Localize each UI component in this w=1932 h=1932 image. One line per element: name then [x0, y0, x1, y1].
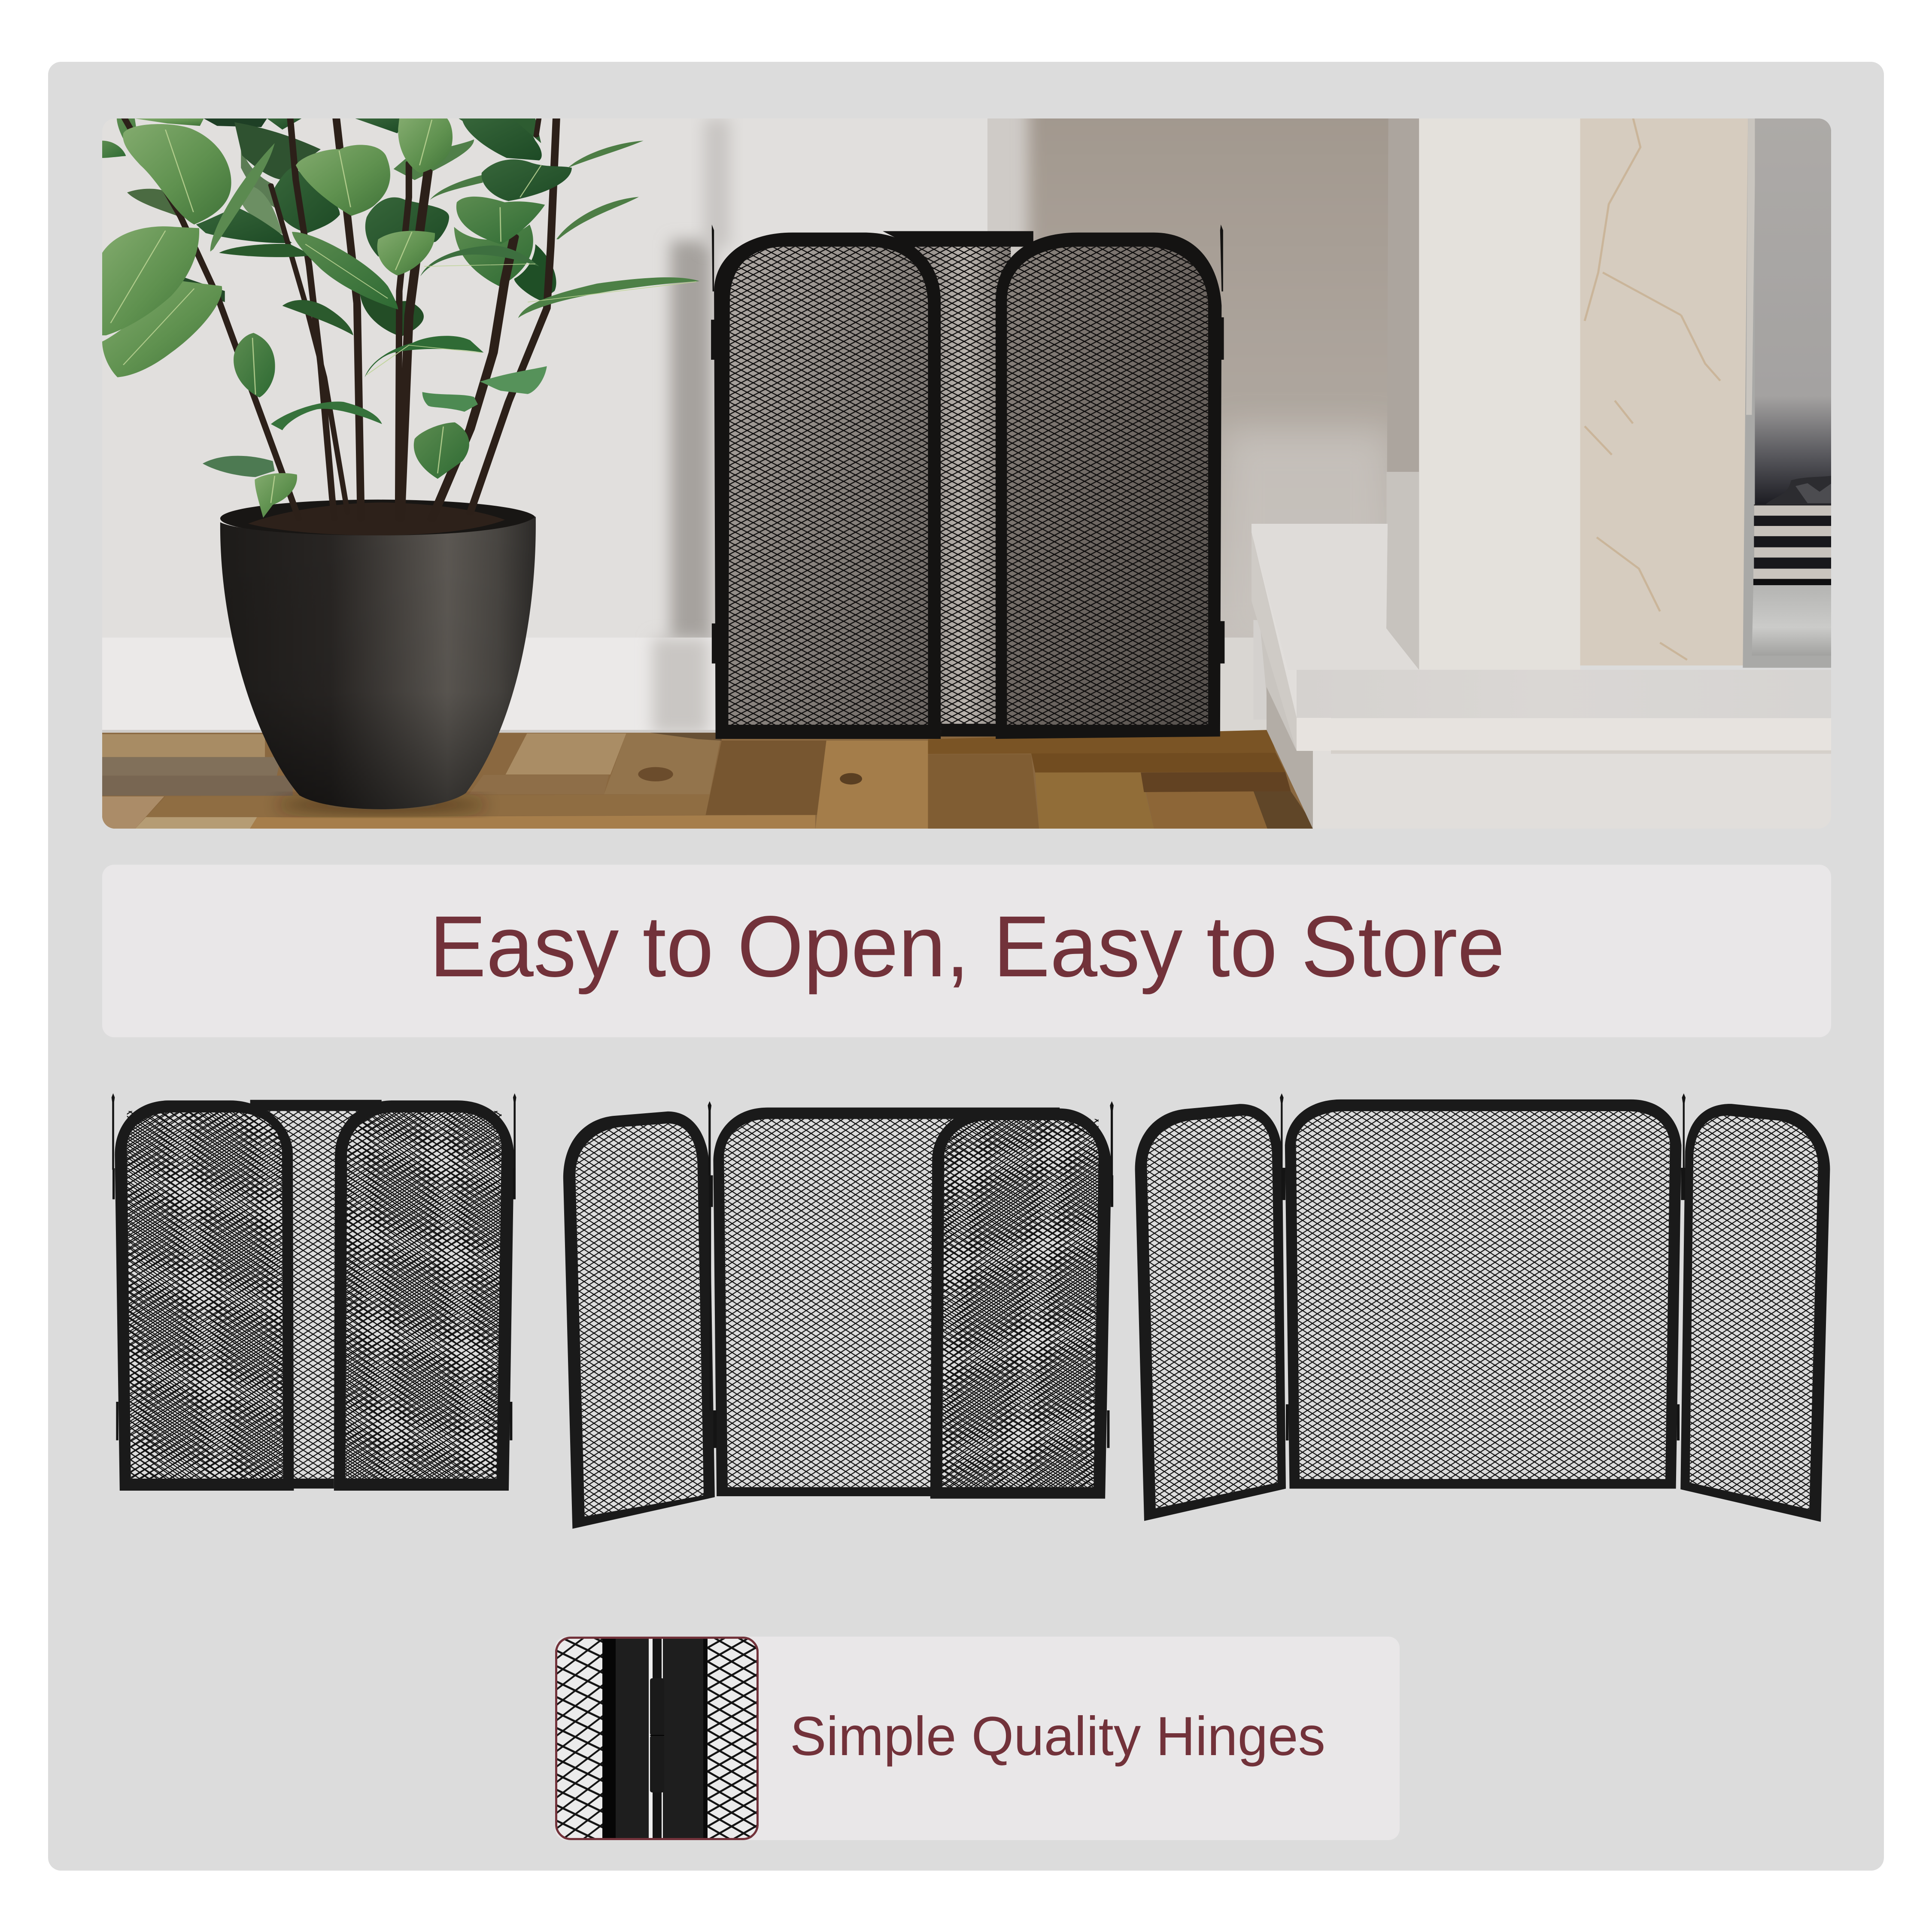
fireplace surround and hearth — [1253, 117, 1836, 831]
fireguard: one door open — [563, 1101, 1114, 1529]
photo: plant, pot and folded screen beside fireplace — [98, 86, 1836, 832]
callout text: Simple Quality Hinges — [790, 1706, 1325, 1767]
rods and hinges — [1280, 1094, 1686, 1440]
fireguard: fully open — [1135, 1094, 1830, 1522]
heading: Easy to Open, Easy to Store — [429, 898, 1505, 995]
back panel mesh — [127, 1111, 501, 1479]
rods and hinges — [112, 1093, 516, 1440]
fireguard: folded closed — [112, 1093, 516, 1491]
front leaves — [102, 118, 699, 518]
hinge close-up thumbnail — [555, 1637, 759, 1840]
stems — [123, 116, 556, 519]
back leaves — [117, 118, 556, 337]
pot back rim and soil — [220, 500, 536, 537]
leaf midribs — [111, 120, 696, 503]
marble slab — [1576, 117, 1749, 665]
frames — [115, 1100, 514, 1491]
screen panel meshes — [728, 240, 1208, 729]
hinges callout card — [555, 1637, 1400, 1840]
skirting board — [102, 638, 1391, 734]
plant — [102, 116, 699, 519]
rods and hinges — [708, 1101, 1114, 1448]
title card — [102, 865, 1831, 1037]
chimney breast pillar — [1386, 117, 1580, 670]
three meshes — [1147, 1111, 1818, 1509]
hearth — [1253, 620, 1835, 831]
overlapping front door mesh — [942, 1120, 1099, 1487]
metal fire surround — [1743, 117, 1836, 668]
hearth left edge — [1252, 524, 1419, 831]
wall — [662, 118, 1388, 638]
frames — [563, 1108, 1112, 1529]
folded fireguard screen leaning on wall — [711, 225, 1224, 739]
black plant pot — [220, 516, 536, 811]
screen frames — [711, 225, 1224, 739]
front panel mesh layers — [127, 1112, 501, 1479]
door and back panel meshes — [575, 1119, 1099, 1516]
wooden herringbone floor — [98, 730, 1321, 832]
frames — [1135, 1100, 1830, 1522]
